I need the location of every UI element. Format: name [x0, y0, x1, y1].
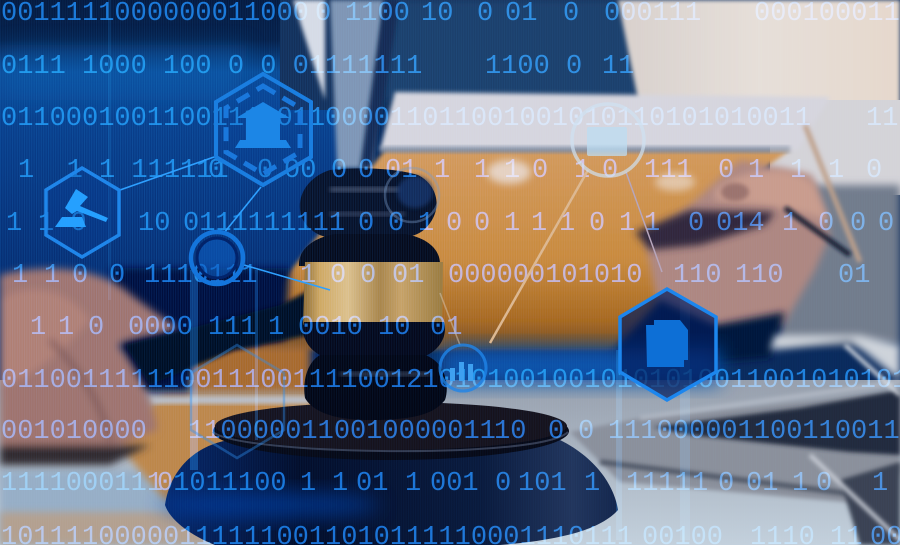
binary row 10: 1: [332, 469, 348, 499]
binary row 10: 01: [746, 469, 778, 499]
binary row 5: 1: [782, 209, 798, 239]
binary row 10: 1111000111: [1, 469, 163, 499]
binary row 6: 0: [109, 261, 125, 291]
dark background behind left hand: [110, 268, 290, 392]
binary row 7: 1: [30, 313, 46, 343]
binary row 4: 0: [358, 156, 374, 186]
icon: chart circle: [440, 345, 486, 391]
binary row 5: 1: [644, 209, 660, 239]
icon: courthouse hexagon: [216, 74, 311, 185]
binary row 5: 1 0: [38, 209, 87, 239]
icon: faded hexagon: [191, 345, 284, 458]
binary row 5: 0: [446, 209, 462, 239]
binary row 10: 1: [584, 469, 600, 499]
binary row 4: 111: [644, 156, 693, 186]
binary row 5: 0111111111: [183, 209, 345, 239]
gavel handle: [125, 290, 310, 385]
binary row 5: 1: [531, 209, 547, 239]
binary row 10: 01: [356, 469, 388, 499]
binary row 6: 1: [44, 261, 60, 291]
binary row 5: 0: [878, 209, 894, 239]
binary row 5: 1: [619, 209, 635, 239]
vertical data light strips: [108, 0, 690, 540]
binary row 2: 11: [602, 52, 634, 82]
binary row 4: 0: [257, 156, 273, 186]
binary row 4: 1 1 1 111111: [18, 156, 229, 186]
network connector lines: [120, 157, 662, 345]
binary row 4: 0: [602, 156, 618, 186]
left hand: [0, 269, 178, 465]
binary row 5: 0: [688, 209, 704, 239]
binary row 6: 1: [300, 261, 316, 291]
binary row 9: 1100000110010000011: [188, 417, 496, 447]
binary row 7: 0: [88, 313, 104, 343]
icon: gavel hexagon: [46, 168, 119, 257]
right hand holding pen: [635, 160, 850, 331]
binary row 4: 0: [866, 156, 882, 186]
binary row 5: 1: [6, 209, 22, 239]
binary row 10: 001: [430, 469, 479, 499]
binary row 6: 1: [12, 261, 28, 291]
binary row 5: 0: [358, 209, 374, 239]
binary row 6: 01: [838, 261, 870, 291]
binary row 4: 0: [331, 156, 347, 186]
binary row 6: 110: [735, 261, 784, 291]
binary row 10: 101: [518, 469, 567, 499]
binary row 4: 0: [208, 156, 224, 186]
binary row 10: 1111: [626, 469, 691, 499]
binary row 5: 014: [716, 209, 765, 239]
binary row 4: 00: [284, 156, 316, 186]
binary row 2: 1100 0: [485, 52, 582, 82]
binary row 7: 01: [430, 313, 462, 343]
icon: circle on gavel: [385, 168, 439, 222]
binary row 5: 0: [589, 209, 605, 239]
binary row 10: 0: [495, 469, 511, 499]
binary row 10: 0: [816, 469, 832, 499]
icon: node circle: [191, 232, 243, 284]
binary row 5: 0: [850, 209, 866, 239]
binary row 9: 001010000: [1, 417, 147, 447]
binary row 9: 10: [494, 417, 526, 447]
binary row 5: 0: [818, 209, 834, 239]
binary row 9: 0: [548, 417, 564, 447]
binary row 6: 110: [673, 261, 722, 291]
binary row 6: 01: [392, 261, 424, 291]
binary row 4: 0: [718, 156, 734, 186]
binary row 4: 1: [574, 156, 590, 186]
binary row 7: 0010: [298, 313, 363, 343]
binary row 4: 1: [790, 156, 806, 186]
binary row 7: 10: [378, 313, 410, 343]
binary row 6: 000000101010: [448, 261, 642, 291]
binary row 10: 1: [405, 469, 421, 499]
gavel head: [299, 168, 447, 420]
binary row 4: 1: [828, 156, 844, 186]
binary row 5: 0: [474, 209, 490, 239]
icon: document hexagon: [620, 289, 716, 400]
binary row 5: 1: [504, 209, 520, 239]
navy sleeve: [610, 300, 785, 370]
binary row 10: 1: [300, 469, 316, 499]
binary row 4: 1: [474, 156, 490, 186]
laptop: [570, 335, 900, 545]
binary row 4: 01: [385, 156, 417, 186]
binary row 7: 111: [208, 313, 257, 343]
binary row 5: 0: [388, 209, 404, 239]
binary row 10: 1: [872, 469, 888, 499]
binary row 10: 0: [718, 469, 734, 499]
gavel sound block: [160, 402, 618, 545]
binary row 5: 1: [418, 209, 434, 239]
binary row 6: 1110111: [144, 261, 257, 291]
binary row 4: 1: [504, 156, 520, 186]
binary row 3: 11: [866, 104, 898, 134]
binary row 3: 01100010011001111011000011011001001010110101010011: [1, 104, 811, 134]
document: white paper and orange folder: [260, 92, 860, 350]
gavel gold band: [303, 262, 443, 325]
binary row 4: 1: [434, 156, 450, 186]
icon: briefcase circle: [572, 104, 644, 176]
binary row 10: 01011100: [157, 469, 287, 499]
binary row 6: 0: [330, 261, 346, 291]
binary row 10: 1: [692, 469, 708, 499]
binary row 4: 0: [532, 156, 548, 186]
binary row 7: 1: [268, 313, 284, 343]
binary row 6: 0: [360, 261, 376, 291]
binary row 7: 1: [58, 313, 74, 343]
binary row 4: 1: [748, 156, 764, 186]
binary row 10: 1: [792, 469, 808, 499]
binary row 2: 0111 1000 100 0 0 01111111: [1, 52, 422, 82]
gavel: [125, 168, 618, 545]
binary row 9: 0: [578, 417, 594, 447]
binary row 7: 0000: [128, 313, 193, 343]
binary row 5: 10: [138, 209, 170, 239]
binary row 5: 1: [559, 209, 575, 239]
binary row 6: 0: [72, 261, 88, 291]
desk surface: [0, 345, 900, 545]
